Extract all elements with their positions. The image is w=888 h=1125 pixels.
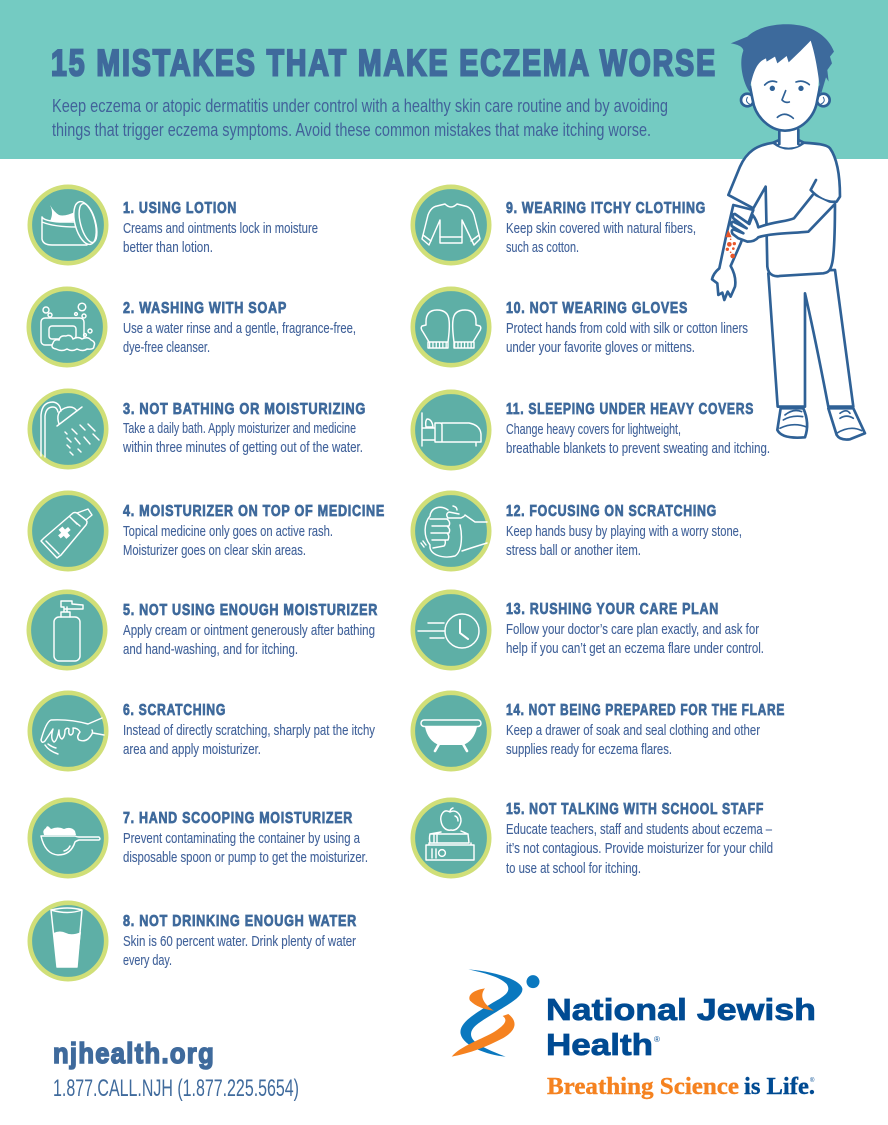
body text: better than lotion. bbox=[123, 239, 213, 256]
intro text bbox=[52, 95, 668, 140]
body text: Take a daily bath. Apply moisturizer and medicine bbox=[123, 420, 356, 437]
body text: every day. bbox=[123, 952, 172, 969]
icon: helix mark bbox=[452, 969, 539, 1057]
item 12: focusing on scratching bbox=[413, 493, 742, 569]
body text bbox=[506, 523, 742, 559]
body text: breathable blankets to prevent sweating and itching. bbox=[506, 440, 770, 457]
item 11: sleeping under heavy covers bbox=[413, 392, 770, 468]
body text: Follow your doctor’s care plan exactly, and ask for bbox=[506, 621, 759, 638]
heading: 2. WASHING WITH SOAP bbox=[123, 300, 287, 317]
heading: 9. WEARING ITCHY CLOTHING bbox=[506, 200, 706, 217]
item 6: scratching bbox=[30, 693, 375, 769]
body text: help if you can’t get an eczema flare under control. bbox=[506, 640, 764, 657]
icon: fist bbox=[413, 493, 489, 569]
icon: scratching hand bbox=[30, 693, 106, 769]
pants bbox=[768, 270, 853, 407]
item 5: not using enough moisturizer bbox=[29, 592, 378, 668]
body text: within three minutes of getting out of the water. bbox=[122, 439, 363, 456]
item 3: not bathing or moisturizing bbox=[30, 391, 366, 467]
body text bbox=[506, 320, 748, 356]
tagline: Breathing Science bbox=[547, 1074, 739, 1100]
face bbox=[765, 81, 809, 118]
icon: mittens bbox=[413, 289, 489, 365]
icon: sweater bbox=[413, 187, 489, 263]
header panel bbox=[0, 0, 888, 159]
icon: medicine tube bbox=[30, 493, 106, 569]
icon: scoop bbox=[30, 800, 106, 876]
body text bbox=[506, 621, 764, 657]
body text bbox=[506, 421, 770, 457]
wordmark: ® bbox=[654, 1035, 660, 1044]
heading: 3. NOT BATHING OR MOISTURIZING bbox=[123, 401, 366, 418]
body text: Change heavy covers for lightweight, bbox=[506, 421, 681, 438]
body text: supplies ready for eczema flares. bbox=[506, 741, 672, 758]
body text bbox=[123, 220, 318, 256]
body text: Apply cream or ointment generously after bathing bbox=[123, 622, 375, 639]
body text: Educate teachers, staff and students about eczema – bbox=[506, 821, 772, 838]
item 8: not drinking enough water bbox=[30, 903, 357, 979]
body text bbox=[123, 622, 375, 658]
body text: Instead of directly scratching, sharply pat the itchy bbox=[123, 722, 375, 739]
heading: 12. FOCUSING ON SCRATCHING bbox=[506, 503, 717, 520]
body text: Keep hands busy by playing with a worry stone, bbox=[506, 523, 742, 540]
heading: 7. HAND SCOOPING MOISTURIZER bbox=[123, 810, 353, 827]
body text: under your favorite gloves or mittens. bbox=[506, 339, 695, 356]
intro text: things that trigger eczema symptoms. Avoid these common mistakes that make itching worse. bbox=[52, 119, 651, 140]
wordmark: Health bbox=[546, 1027, 653, 1062]
heading: 5. NOT USING ENOUGH MOISTURIZER bbox=[123, 602, 378, 619]
heading: 13. RUSHING YOUR CARE PLAN bbox=[506, 601, 719, 618]
body text: disposable spoon or pump to get the moisturizer. bbox=[123, 849, 368, 866]
item 15: not talking with school staff bbox=[413, 800, 773, 877]
tagline: is Life. bbox=[744, 1074, 815, 1100]
ears bbox=[741, 94, 754, 106]
heading: 8. NOT DRINKING ENOUGH WATER bbox=[123, 913, 357, 930]
body text bbox=[123, 523, 333, 559]
tagline: ® bbox=[810, 1077, 815, 1084]
icon: soap and bubbles bbox=[29, 289, 105, 365]
contact: website and phone: njhealth.org bbox=[53, 1038, 215, 1070]
body text bbox=[123, 722, 375, 758]
body text: Moisturizer goes on clear skin areas. bbox=[123, 542, 306, 559]
body text: dye-free cleanser. bbox=[123, 339, 210, 356]
intro text: Keep eczema or atopic dermatitis under control with a healthy skin care routine and by avoiding bbox=[52, 95, 668, 116]
wordmark: National Jewish bbox=[546, 992, 816, 1027]
tagline bbox=[547, 1074, 815, 1100]
contact: website and phone: 1.877.CALL.NJH (1.877.225.5654) bbox=[53, 1075, 299, 1102]
icon: glass of water bbox=[30, 903, 106, 979]
body text: to use at school for itching. bbox=[506, 860, 641, 877]
logo: National Jewish Health bbox=[452, 969, 816, 1100]
item 1: using lotion bbox=[30, 187, 318, 263]
heading: 4. MOISTURIZER ON TOP OF MEDICINE bbox=[123, 503, 385, 520]
item 10: not wearing gloves bbox=[413, 289, 748, 365]
body text bbox=[123, 933, 356, 969]
heading: 15. NOT TALKING WITH SCHOOL STAFF bbox=[506, 801, 764, 818]
shirt bbox=[728, 143, 840, 276]
item 9: wearing itchy clothing bbox=[413, 187, 706, 263]
icon: bathtub bbox=[413, 693, 489, 769]
body text bbox=[122, 420, 363, 456]
body text: Prevent contaminating the container by using a bbox=[123, 830, 360, 847]
body text bbox=[506, 220, 696, 256]
body text: area and apply moisturizer. bbox=[123, 741, 261, 758]
body text bbox=[123, 320, 356, 356]
icon: books and apple bbox=[413, 800, 489, 876]
body text: Skin is 60 percent water. Drink plenty of water bbox=[123, 933, 356, 950]
body text: Keep skin covered with natural fibers, bbox=[506, 220, 696, 237]
icon: lotion jar bbox=[30, 187, 106, 263]
illustration: boy scratching eczema rash bbox=[712, 24, 865, 440]
crossing arm and hand bbox=[731, 195, 834, 242]
contact: website and phone bbox=[53, 1038, 299, 1102]
icon: pump bottle bbox=[29, 592, 105, 668]
icon: clock with speed lines bbox=[413, 592, 489, 668]
head bbox=[748, 33, 822, 131]
body text: stress ball or another item. bbox=[506, 542, 641, 559]
heading: 1. USING LOTION bbox=[123, 200, 237, 217]
shoes bbox=[777, 408, 865, 440]
body text bbox=[506, 722, 760, 758]
forearm with rash bbox=[712, 205, 753, 300]
body text bbox=[123, 830, 368, 866]
body text: it’s not contagious. Provide moisturizer for your child bbox=[506, 840, 773, 857]
heading: 6. SCRATCHING bbox=[123, 702, 226, 719]
item 7: hand scooping moisturizer bbox=[30, 800, 368, 876]
body text: Keep a drawer of soak and seal clothing and other bbox=[506, 722, 760, 739]
item 13: rushing your care plan bbox=[413, 592, 764, 668]
icon: bed bbox=[413, 392, 489, 468]
neck and collar bbox=[773, 140, 804, 148]
body text: Topical medicine only goes on active rash. bbox=[123, 523, 333, 540]
item 14: not being prepared for the flare bbox=[413, 693, 785, 769]
item 4: moisturizer on top of medicine bbox=[30, 493, 385, 569]
body text: Creams and ointments lock in moisture bbox=[123, 220, 318, 237]
body text: such as cotton. bbox=[506, 239, 579, 256]
hair bbox=[731, 24, 834, 95]
body text: and hand-washing, and for itching. bbox=[123, 641, 298, 658]
body text: Protect hands from cold with silk or cotton liners bbox=[506, 320, 748, 337]
wordmark bbox=[546, 992, 816, 1062]
heading: 14. NOT BEING PREPARED FOR THE FLARE bbox=[506, 702, 785, 719]
heading: 10. NOT WEARING GLOVES bbox=[506, 300, 688, 317]
body text: Use a water rinse and a gentle, fragrance-free, bbox=[123, 320, 356, 337]
heading: 11. SLEEPING UNDER HEAVY COVERS bbox=[506, 401, 754, 418]
body text bbox=[506, 821, 773, 877]
item 2: washing with soap bbox=[29, 289, 356, 365]
icon: shower bbox=[30, 391, 106, 467]
